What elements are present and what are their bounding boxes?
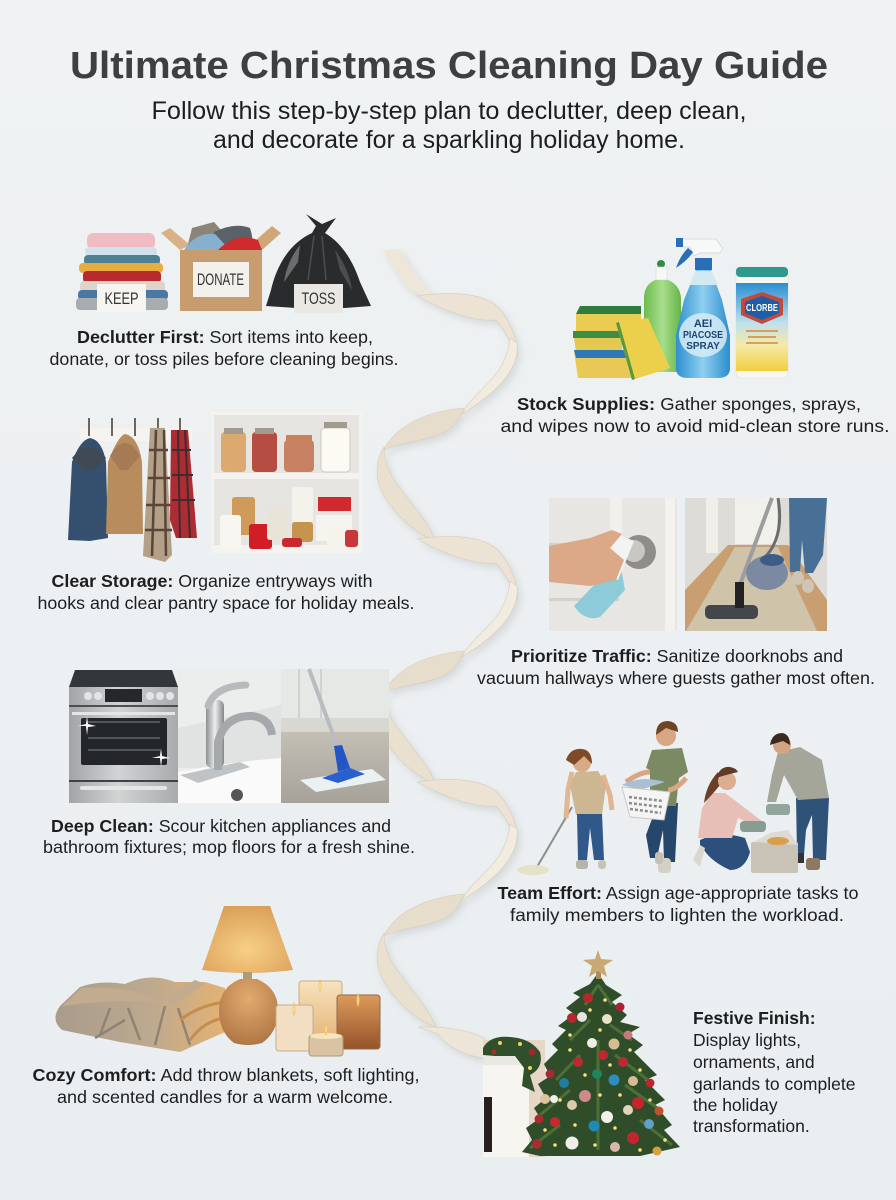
caption: declutter first: Declutter First: Sort items into keep, — [77, 327, 373, 347]
caption: clear storage — [38, 571, 414, 613]
figure: man with box — [751, 733, 829, 873]
icon: table lamp — [202, 906, 293, 1045]
caption: clear storage: hooks and clear pantry space for holiday meals. — [38, 593, 414, 613]
caption: declutter first — [50, 327, 398, 369]
caption: stock supplies: and wipes now to avoid mid-clean store runs. — [500, 416, 890, 436]
caption: stock supplies — [500, 394, 890, 436]
icon: coats and scarves on hooks — [68, 418, 197, 562]
caption: festive finish: Display lights, — [693, 1030, 801, 1050]
icon: blue spray bottle: SPRAY — [686, 341, 720, 352]
caption: festive finish: ornaments, and — [693, 1052, 815, 1072]
caption: cozy comfort — [32, 1065, 420, 1107]
caption: festive finish — [693, 1008, 855, 1136]
caption: deep clean — [43, 816, 415, 857]
caption: stock supplies: Stock Supplies: Gather sponges, sprays, — [517, 394, 861, 414]
caption: team effort: Team Effort: Assign age-appropriate tasks to — [498, 883, 858, 903]
caption: deep clean: Deep Clean: Scour kitchen appliances and — [51, 816, 391, 836]
icon: donate box: DONATE — [197, 270, 244, 289]
caption: deep clean: bathroom fixtures; mop floors for a fresh shine. — [43, 837, 415, 857]
icon: toss trash bag: TOSS — [302, 289, 336, 308]
icon: keep pile of folded clothes: KEEP — [104, 289, 138, 308]
title: Ultimate Christmas Cleaning Day Guide — [70, 45, 828, 87]
caption: team effort — [498, 883, 858, 925]
figure: boy with laundry basket — [622, 721, 688, 873]
subtitle: Follow this step-by-step plan to declutter, deep clean, — [152, 97, 746, 125]
photo: mop on a shiny floor — [281, 669, 389, 803]
caption: festive finish: garlands to complete — [693, 1074, 855, 1094]
caption: festive finish: Festive Finish: — [693, 1008, 816, 1028]
panel: cozy comfort — [32, 906, 420, 1107]
icon: blue spray bottle — [676, 238, 730, 378]
photo: stainless stove — [69, 670, 178, 803]
caption: festive finish: the holiday — [693, 1095, 778, 1115]
panel: declutter first — [50, 214, 398, 369]
icon: blue spray bottle: PIACOSE — [683, 330, 723, 341]
icon: keep pile of folded clothes — [76, 233, 168, 312]
caption: clear storage: Clear Storage: Organize entryways with — [52, 571, 372, 591]
caption: cozy comfort: Cozy Comfort: Add throw blankets, soft lighting, — [32, 1065, 420, 1085]
caption: declutter first: donate, or toss piles before cleaning begins. — [50, 349, 398, 369]
ribbon: winding cream ribbon — [377, 249, 517, 1058]
panel: clear storage — [38, 412, 414, 613]
icon: three candles in glass jars — [276, 980, 380, 1056]
panel: festive finish — [483, 950, 855, 1157]
photo: sanitizing a doorknob — [549, 498, 677, 631]
icon: wipes canister — [736, 267, 788, 378]
caption: prioritize traffic: Prioritize Traffic: Sanitize doorknobs and — [511, 646, 843, 666]
icon: christmas tree — [522, 950, 680, 1156]
panel: team effort — [498, 721, 858, 925]
icon: toss trash bag — [266, 214, 371, 313]
panel: stock supplies — [500, 238, 890, 436]
caption: team effort: family members to lighten the workload. — [510, 905, 844, 925]
icon: pantry shelves with jars — [211, 412, 362, 553]
caption: prioritize traffic — [477, 646, 875, 688]
photo: vacuuming a hallway — [685, 498, 827, 631]
panel: prioritize traffic — [477, 498, 875, 688]
caption: cozy comfort: and scented candles for a warm welcome. — [57, 1087, 393, 1107]
figure: woman kneeling — [693, 767, 766, 870]
icon: blue spray bottle: AEI — [694, 318, 712, 330]
caption: prioritize traffic: vacuum hallways where guests gather most often. — [477, 668, 875, 688]
figure: child with mop — [517, 749, 612, 875]
icon: green dish soap bottle — [644, 260, 681, 372]
subtitle: and decorate for a sparkling holiday home. — [213, 126, 685, 154]
icon: wipes canister: CLORBE — [746, 303, 778, 314]
caption: festive finish: transformation. — [693, 1116, 810, 1136]
icon: knitted throw blanket — [55, 977, 225, 1052]
photo: chrome faucet and sink — [178, 669, 281, 803]
panel: deep clean — [43, 669, 415, 857]
subtitle — [152, 97, 746, 154]
icon: donate box — [161, 222, 281, 311]
icon: stacked sponges — [573, 306, 670, 380]
icon: white mantel with garland — [483, 1037, 545, 1157]
